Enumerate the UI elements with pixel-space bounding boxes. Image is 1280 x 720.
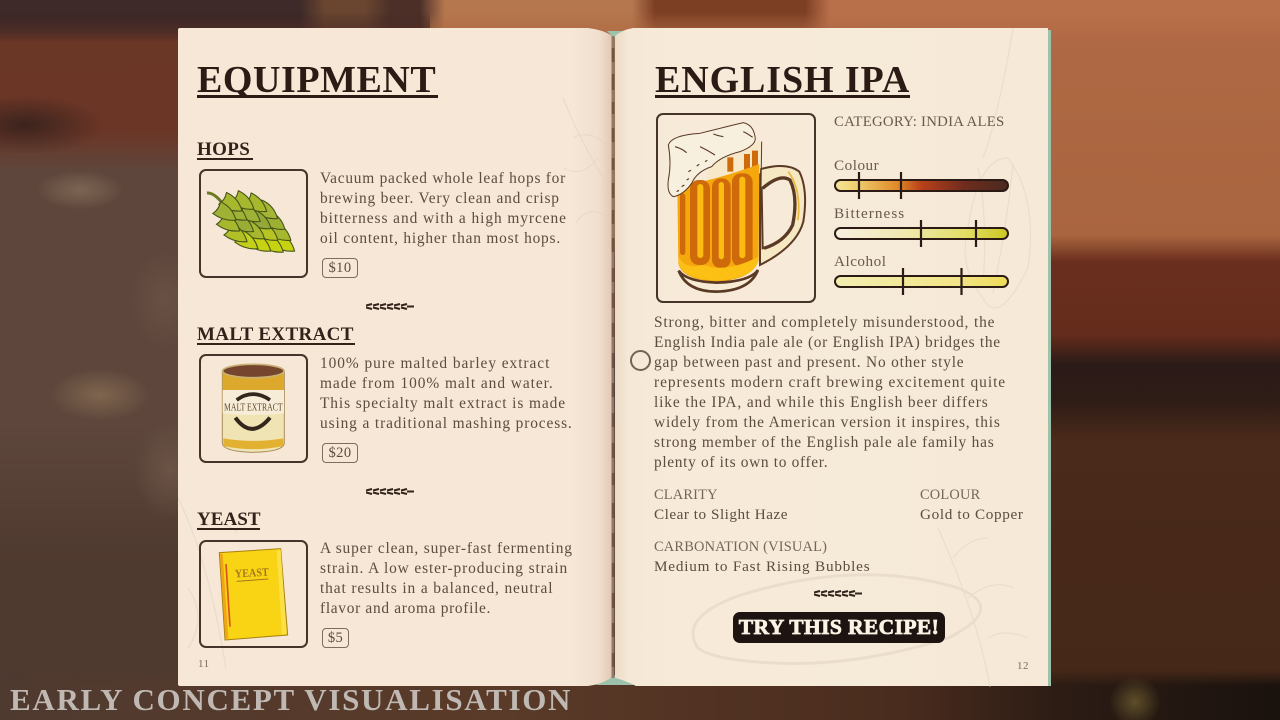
beer description: English India pale ale (or English IPA) bridges the <box>654 334 1001 351</box>
beer description: represents modern craft brewing excitement quite <box>654 374 1006 391</box>
icon: yeast packet: YEAST <box>234 566 269 581</box>
left page <box>178 28 612 686</box>
gauge: alcohol: Alcohol <box>834 253 886 270</box>
malt description: This specialty malt extract is made <box>320 395 566 412</box>
button: try this recipe: TRY THIS RECIPE! <box>739 615 939 639</box>
beer description: widely from the American version it inspires, this <box>654 414 1001 431</box>
book <box>178 28 1051 687</box>
glass upper <box>707 142 762 180</box>
gauge: bitterness <box>834 205 1009 247</box>
gauge: alcohol <box>834 253 1009 295</box>
page number 11: 11 <box>198 658 210 670</box>
hops price <box>322 258 358 278</box>
divider: above button <box>814 590 862 597</box>
hops description <box>320 170 567 247</box>
malt description: using a traditional mashing process. <box>320 415 573 432</box>
yeast description: that results in a balanced, neutral <box>320 580 553 597</box>
top band <box>0 0 1280 34</box>
hops title: HOPS <box>197 139 250 160</box>
mug handle <box>760 166 805 265</box>
section: malt extract <box>197 324 573 463</box>
hops price: $10 <box>329 260 351 276</box>
yeast description: flavor and aroma profile. <box>320 600 491 617</box>
right page heading: English IPA: ENGLISH IPA <box>655 59 910 101</box>
gauge: colour: Colour <box>834 157 879 174</box>
heading: equipment: EQUIPMENT <box>197 59 436 101</box>
stat: colour <box>920 487 1024 523</box>
cover edges <box>607 31 625 38</box>
stat: carbonation: CARBONATION (VISUAL) <box>654 539 827 555</box>
stat: clarity: Clear to Slight Haze <box>654 506 788 523</box>
malt price <box>322 443 358 463</box>
beer description <box>654 314 1006 471</box>
stat: clarity: CLARITY <box>654 487 718 503</box>
beer description: Strong, bitter and completely misunderstood, the <box>654 314 995 331</box>
malt price: $20 <box>329 445 351 461</box>
malt description: made from 100% malt and water. <box>320 375 554 392</box>
foam <box>668 123 755 197</box>
malt description <box>320 355 573 432</box>
section: yeast <box>197 509 573 648</box>
divider: hops to malt <box>366 303 414 310</box>
cursor ring <box>630 350 651 371</box>
beer description: like the IPA, and while this English beer differs <box>654 394 989 411</box>
icon: yeast packet <box>199 540 308 648</box>
section: hops <box>197 139 567 278</box>
divider: malt to yeast <box>366 488 414 495</box>
hops description: oil content, higher than most hops. <box>320 230 561 247</box>
yeast price <box>322 628 349 648</box>
stat: colour: COLOUR <box>920 487 980 503</box>
stat: carbonation: Medium to Fast Rising Bubbles <box>654 558 870 575</box>
hops description: bitterness and with a high myrcene <box>320 210 567 227</box>
hops description: brewing beer. Very clean and crisp <box>320 190 560 207</box>
spine <box>612 36 614 678</box>
icon: malt can: MALT EXTRACT <box>224 403 283 414</box>
stat: clarity <box>654 487 788 523</box>
yeast description: A super clean, super-fast fermenting <box>320 540 573 557</box>
page number 12: 12 <box>1017 660 1029 672</box>
gauge: colour <box>834 157 1009 199</box>
icon: hop cone <box>199 169 308 278</box>
beer description: strong member of the English pale ale family has <box>654 434 995 451</box>
beer body <box>677 164 759 282</box>
mug base <box>679 270 758 292</box>
hops description: Vacuum packed whole leaf hops for <box>320 170 566 187</box>
bottom band <box>366 672 1280 720</box>
malt title: MALT EXTRACT <box>197 324 354 345</box>
yeast description: strain. A low ester-producing strain <box>320 560 568 577</box>
stat: carbonation <box>654 539 870 575</box>
category label: CATEGORY: INDIA ALES <box>834 114 1005 130</box>
yeast price: $5 <box>328 630 343 646</box>
decorative watermarks <box>178 28 1031 687</box>
malt description: 100% pure malted barley extract <box>320 355 550 372</box>
yeast description <box>320 540 573 617</box>
yeast title: YEAST <box>197 509 261 530</box>
beer description: gap between past and present. No other style <box>654 354 964 371</box>
illustration: beer mug <box>656 113 816 303</box>
beer description: plenty of its own to offer. <box>654 454 828 471</box>
icon: malt can <box>199 354 308 463</box>
right page <box>615 28 1048 686</box>
caption: early concept visualisation: EARLY CONCEPT VISUALISATION <box>10 682 572 717</box>
gauge: bitterness: Bitterness <box>834 205 905 222</box>
stat: colour: Gold to Copper <box>920 506 1024 523</box>
